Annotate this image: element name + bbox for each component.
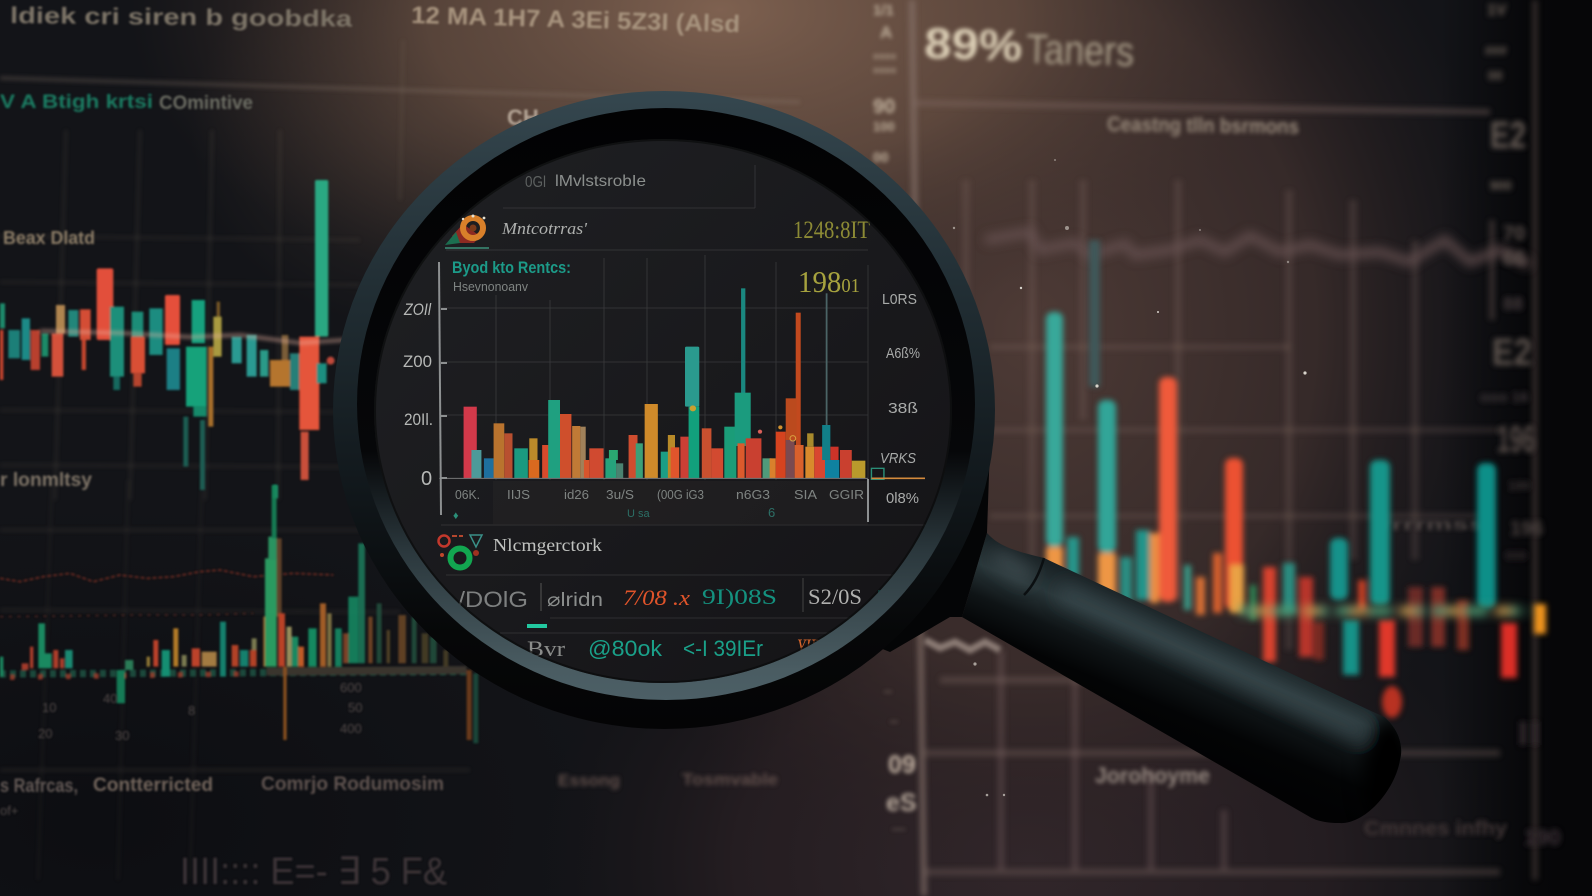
candlestick chart: top left	[0, 180, 335, 498]
axis labels: centre column: --	[890, 714, 898, 728]
lens metrics row 2: @80ok	[588, 636, 663, 661]
faint small numbers: bottom left: 8	[188, 703, 195, 718]
axis labels: centre column: 00	[873, 149, 889, 165]
noisy pale trend line: right panel	[985, 232, 1530, 265]
bar chart: bottom left	[0, 485, 478, 743]
faint small numbers: bottom left: 40	[103, 691, 117, 706]
axis labels: centre column: ====	[873, 66, 897, 77]
faint small numbers: bottom left: 50	[348, 700, 362, 715]
blurred background labels: left: COmintive	[159, 93, 253, 114]
lens right axis values: 38ß	[888, 400, 918, 417]
faint small numbers: bottom left: 600	[340, 680, 362, 695]
magnifying glass	[333, 91, 1418, 835]
axis labels: centre column: eS	[886, 789, 917, 817]
lens metrics row 1: /DOlG	[458, 587, 528, 612]
lens row labels: 1248:8IT	[793, 217, 870, 244]
lens x-axis labels	[453, 490, 864, 519]
bar chart: right panel	[1046, 240, 1546, 718]
axis labels: centre column: 09	[888, 751, 916, 779]
lens rim	[333, 91, 995, 729]
blurred bottom labels: right panel: Cmnnes infhy	[1364, 818, 1508, 840]
lens metrics row 2: Bvr	[527, 636, 566, 661]
lens x-axis labels: IIJS	[507, 487, 530, 502]
faint small numbers: bottom left: of+	[0, 803, 18, 818]
axis labels: right column	[1480, 2, 1561, 850]
blurred background labels: left	[0, 2, 740, 797]
lens title row	[526, 174, 646, 187]
dust specks	[953, 159, 1307, 796]
background grid: left panel	[0, 40, 800, 880]
pink price line: top left chart	[40, 331, 530, 375]
lens metrics row 2: <-I 39IEr	[683, 636, 763, 661]
lens right axis values: 0l8%	[886, 490, 919, 507]
lens row labels: Hsevnonoanv	[453, 280, 529, 294]
lens inner edge shadow	[375, 140, 951, 682]
lens x-axis labels: (00G iG3	[657, 487, 704, 502]
icon: green and red badge	[438, 535, 482, 568]
lens left axis values: Z00	[403, 352, 432, 371]
lens left axis values: 20Il.	[404, 410, 433, 429]
lens x-axis labels: 06K.	[455, 487, 480, 502]
faint small numbers: bottom left: 30	[115, 728, 129, 743]
lens x-axis labels: 3u/S	[606, 487, 634, 502]
axis labels: centre column: 100	[873, 119, 895, 134]
axis labels: right column: II	[1517, 715, 1541, 753]
lens x-axis labels: 6	[768, 505, 775, 520]
axis labels: centre column: --	[884, 684, 892, 698]
faint small numbers: bottom left: 10	[42, 700, 56, 715]
axis labels: right column: 196	[1510, 518, 1543, 540]
lens axis	[439, 262, 868, 522]
faint small numbers: bottom left: 400	[340, 721, 362, 736]
blurred bottom labels: right panel: Jorohoyme	[1095, 763, 1210, 788]
lens title row: lMvlstsrobIe	[555, 173, 646, 190]
axis labels: right column: E2	[1492, 332, 1532, 374]
lens row labels	[453, 222, 870, 292]
noisy stub under the lens	[925, 640, 1000, 650]
blurred background labels: left: Comrjo Rodumosim	[261, 774, 444, 795]
axis labels: centre column: ----	[892, 824, 905, 835]
lens metrics row 1: S2/0S	[808, 584, 862, 609]
axis labels: centre column	[873, 2, 917, 835]
lens label strip reflection	[493, 481, 868, 525]
lens metrics row 2: YIB	[797, 634, 820, 659]
axis labels: right column: 900	[1490, 178, 1512, 193]
lens metrics row 1: 7/08 .x	[623, 585, 690, 610]
handle	[883, 468, 1402, 823]
blurred background labels: left: s Rafrcas,	[0, 776, 78, 797]
lens row labels: Mntcotrras'	[501, 219, 587, 238]
sub heading: right panel: Ceastng tlln bsrmons	[1107, 113, 1299, 139]
axis labels: right column: 196	[1497, 419, 1535, 461]
lens right axis values: L0RS	[882, 291, 917, 308]
lens bar chart	[439, 288, 925, 479]
blurred background labels: left: ldiek cri siren b goobdka	[10, 2, 352, 32]
axis labels: right column: 100	[1508, 478, 1530, 493]
big heading: 89% Taners: 89%	[924, 19, 1023, 71]
axis labels: right column: 88	[1503, 294, 1523, 314]
faint formula text: bottom: IIII:::: E=- ∃ 5 F&	[180, 851, 447, 893]
axis labels: centre column: 90	[873, 96, 895, 118]
lens left axis values: 0	[421, 468, 432, 490]
lens glass	[374, 139, 952, 683]
background grid: right panel	[912, 0, 1535, 896]
axis labels: right column: 66	[1503, 248, 1525, 270]
big heading: 89% Taners	[924, 19, 1135, 75]
big heading: 89% Taners: Taners	[1026, 25, 1135, 75]
axis labels: right column: 000	[1505, 548, 1527, 563]
lens metrics row 1: ⌀lridn	[547, 590, 603, 611]
blurred bottom labels: right panel: Essong	[558, 771, 620, 790]
axis labels: centre column: A	[880, 23, 892, 42]
lens right axis values: A6ß%	[886, 345, 920, 362]
lens lower heading: Nlcmgerctork	[493, 535, 602, 555]
colourful band across the right chart base	[1240, 606, 1530, 616]
axis labels: right column: 190	[1524, 825, 1561, 850]
lens row labels: 19801	[798, 264, 860, 299]
lens x-axis labels: SIA	[794, 487, 817, 502]
magnified dashboard	[403, 165, 928, 661]
blurred background labels: left: Contterricted	[93, 775, 213, 796]
axis labels: right column: 70	[1503, 223, 1525, 245]
lens metrics row 2	[527, 624, 820, 661]
lens title row: 0Gl	[525, 174, 546, 191]
axis labels: centre column: ====	[873, 52, 897, 63]
blurred background labels: left: CH	[507, 105, 539, 130]
lens x-axis labels: GGIR	[829, 487, 864, 502]
lens right axis values: VRKS	[880, 450, 916, 467]
lens left axis values: ZOIl	[403, 300, 432, 319]
axis labels: right column: ooo 16	[1480, 389, 1528, 406]
axis labels: right column: ###	[1485, 43, 1507, 58]
faint small numbers: bottom left	[0, 680, 362, 818]
lens metrics row 1	[458, 578, 884, 612]
blurred background labels: left: Beax Dlatd	[3, 228, 95, 248]
axis labels: right column: E2	[1490, 115, 1526, 157]
blurred background labels: left: r lonmltsy	[0, 470, 92, 491]
blurred background labels: left: 12 MA 1H7 A 3Ei 5Z3I (Alsd	[411, 2, 740, 38]
lens x-axis labels: n6G3	[736, 487, 770, 502]
blurred bottom labels: right panel	[558, 515, 1508, 840]
axis labels: right column: 1V	[1487, 2, 1507, 19]
lens right axis values	[880, 291, 920, 507]
lens left axis values	[403, 300, 433, 490]
faint small numbers: bottom left: 20	[38, 726, 52, 741]
axis labels: centre column: 1/1	[873, 2, 894, 19]
lens metrics row 1: 9I)08S	[702, 584, 777, 609]
blurred bottom labels: right panel: Tosmvable	[682, 770, 778, 789]
axis labels: right column: 00	[1488, 68, 1502, 83]
lens x-axis labels: id26	[564, 487, 589, 502]
lens row labels: Byod kto Rentcs:	[452, 258, 571, 277]
lens x-axis labels: ♦	[453, 510, 459, 522]
blurred bottom labels: right panel: rrrrmss	[1380, 515, 1485, 534]
blurred background labels: left: V A Btigh krtsi	[0, 92, 153, 113]
lens grid lines	[441, 165, 928, 633]
icon: orange eye gear	[445, 214, 489, 248]
lens x-axis labels: U sa	[627, 508, 650, 520]
